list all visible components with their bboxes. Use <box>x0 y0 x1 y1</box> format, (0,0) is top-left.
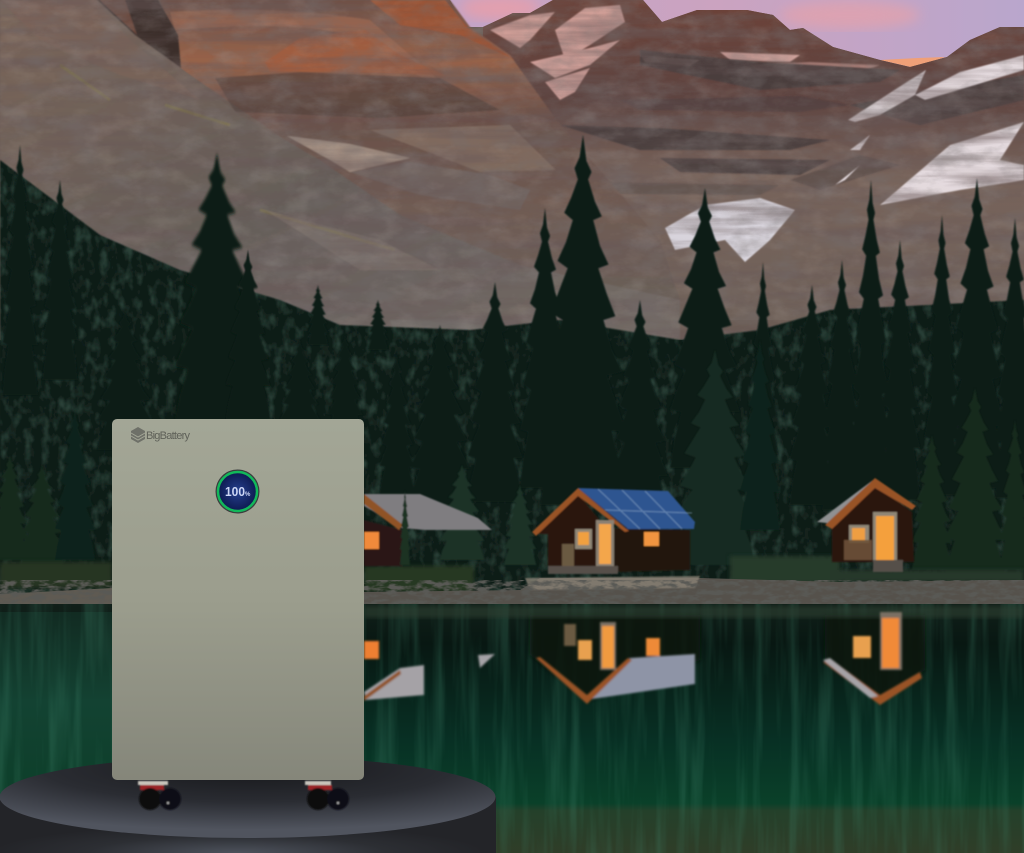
reflection: centre cabin <box>536 622 695 704</box>
glacier <box>665 198 795 262</box>
solar panels <box>578 488 695 529</box>
shore rocks <box>0 576 1024 612</box>
sky <box>0 0 1024 90</box>
pink alpenglow snow <box>490 5 880 100</box>
dark cabin shadows on water <box>530 615 700 700</box>
charge display: 100 <box>225 484 245 499</box>
mountain: snowy right ridge <box>480 0 1024 320</box>
lit green spruces <box>0 340 1024 578</box>
mountain: grey left slope <box>0 0 680 372</box>
cabin: right <box>817 478 916 572</box>
mountain: base rock <box>0 0 1024 340</box>
shoreline grass <box>0 556 1024 592</box>
white snow fields <box>835 55 1024 205</box>
reflection: left cabin <box>364 641 495 701</box>
charge display: % <box>245 492 251 498</box>
BigBattery logo <box>131 427 190 443</box>
cabin reflections <box>364 612 922 705</box>
pale scree fan <box>287 136 410 172</box>
mountain: glowing centre massif <box>160 0 680 300</box>
strata bands on ridge <box>560 50 1024 195</box>
background conifers <box>3 135 1024 520</box>
cabin: left <box>364 490 492 566</box>
reflection: right cabin <box>823 612 922 705</box>
cabin: centre with solar roof <box>532 488 695 574</box>
lake <box>0 604 1024 853</box>
tall foreground fir <box>174 153 260 423</box>
pedestal <box>0 756 496 853</box>
battery casters <box>138 781 349 810</box>
BigBattery logo: BigBattery <box>146 430 190 442</box>
charge display <box>216 470 260 514</box>
battery case <box>112 419 364 780</box>
forest mass <box>0 150 1024 600</box>
rock texture overlays <box>0 0 1024 340</box>
battery unit <box>112 419 364 810</box>
